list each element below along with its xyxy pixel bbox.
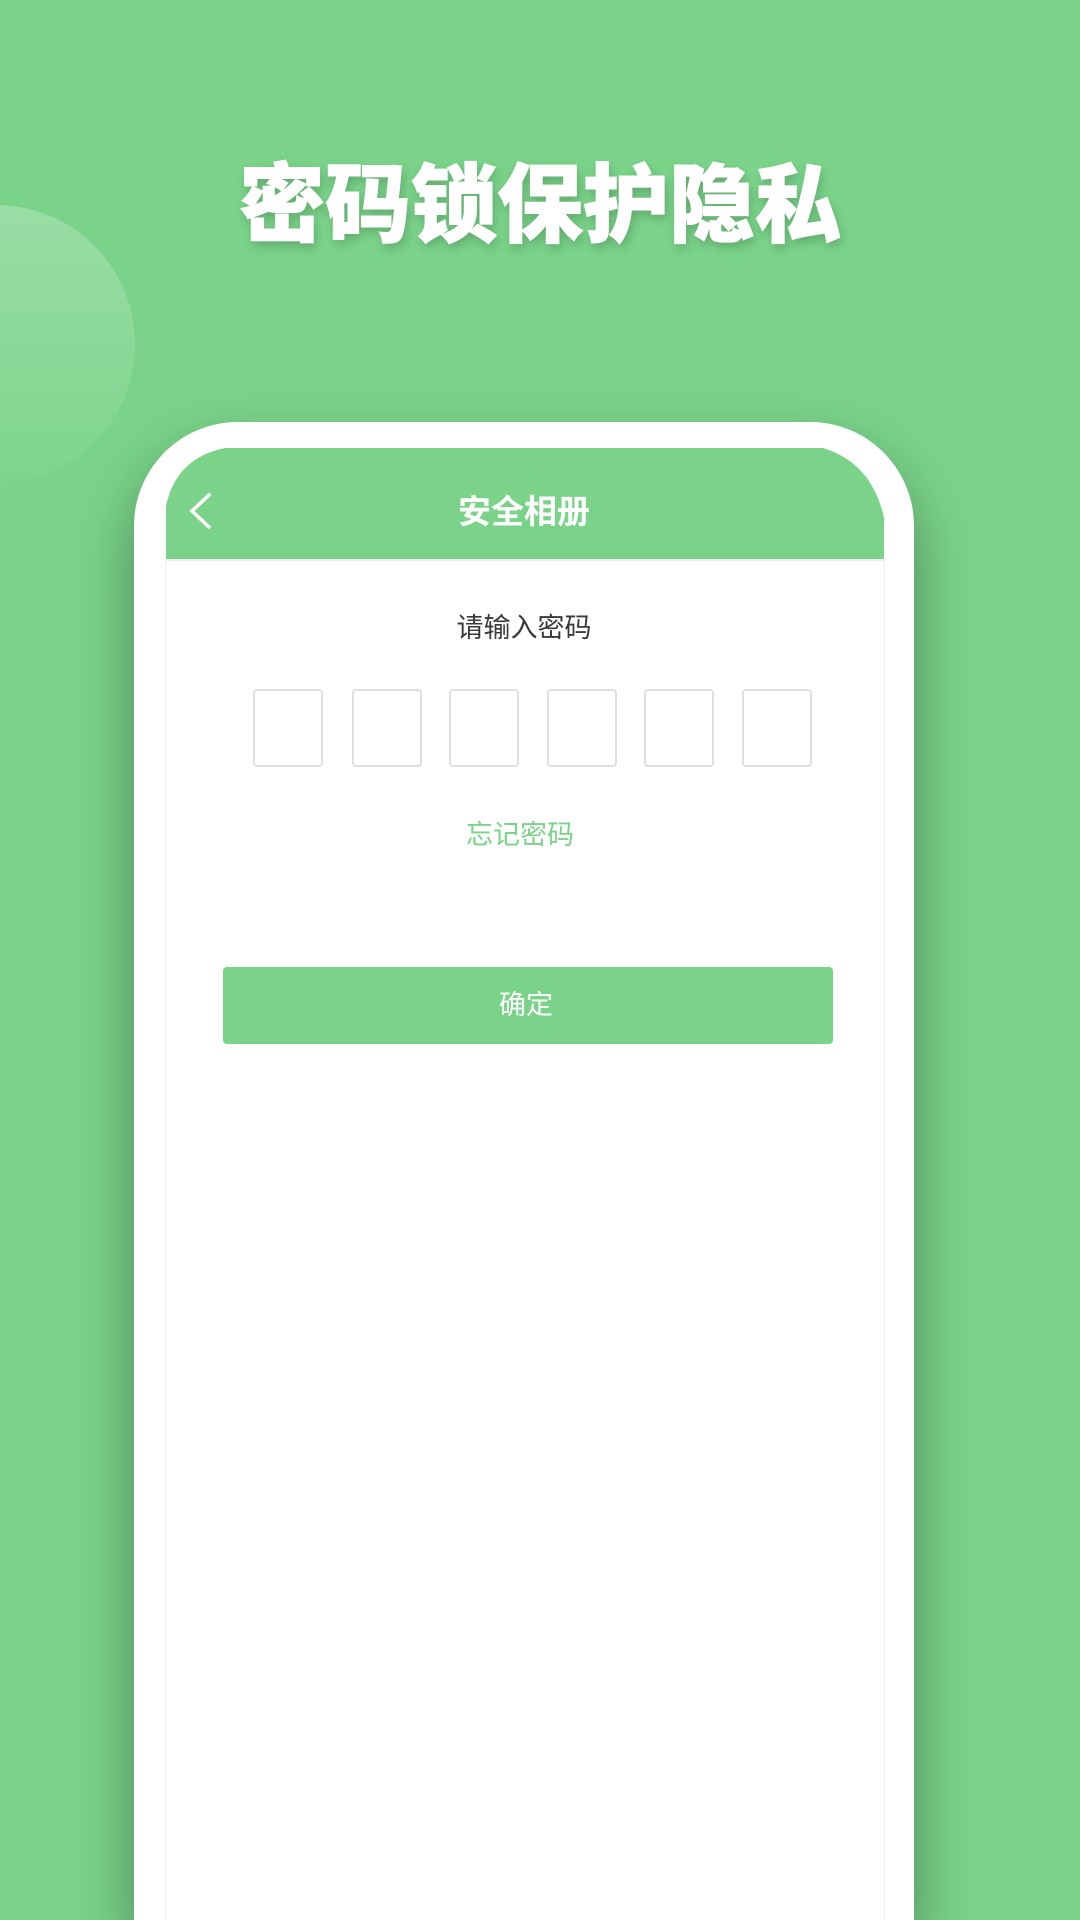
decorative circle	[0, 205, 135, 483]
phone mockup	[134, 422, 914, 1920]
confirm button: 确定	[499, 990, 553, 1020]
password input boxes	[253, 689, 812, 767]
confirm button	[223, 967, 833, 1044]
forgot password link: 忘记密码	[466, 820, 574, 850]
password prompt: 请输入密码	[456, 613, 592, 643]
title: 密码锁保护隐私	[239, 158, 841, 254]
icon: back arrow	[190, 492, 212, 530]
header title: 安全相册	[458, 493, 590, 530]
panel: app header	[166, 448, 884, 561]
panel: phone screen	[166, 559, 884, 1920]
